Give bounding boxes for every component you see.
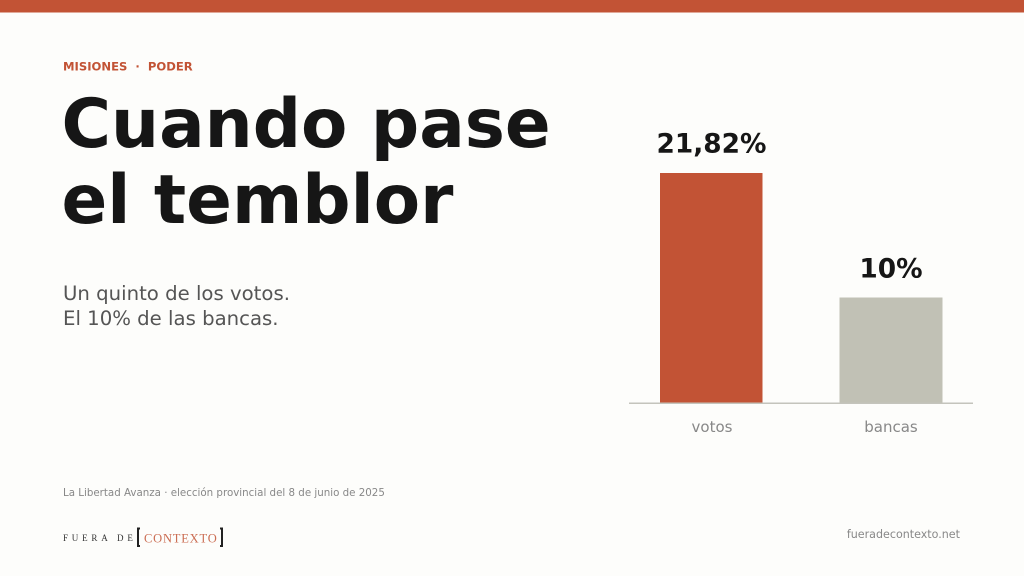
bar: bancas	[840, 298, 942, 403]
logo: Fuera de Contexto	[63, 528, 222, 546]
source note: La Libertad Avanza · elección provincial del 8 de junio de 2025	[63, 487, 385, 499]
subtitle: El 10% de las bancas.	[63, 307, 279, 330]
chart baseline	[629, 402, 973, 404]
bar chart: votos vs bancas	[629, 128, 973, 436]
logo: Fuera de Contexto: FUERA DE	[63, 533, 137, 543]
title	[62, 84, 551, 239]
logo: Fuera de Contexto: CONTEXTO	[144, 532, 218, 546]
value: bancas: 10%	[859, 254, 923, 284]
subtitle	[63, 282, 290, 330]
title: el temblor	[62, 160, 454, 239]
subtitle: Un quinto de los votos.	[63, 282, 290, 305]
bar: votos	[660, 173, 762, 403]
category label: bancas: bancas	[864, 418, 918, 436]
top accent band	[0, 0, 1024, 12]
website: fueradecontexto.net	[847, 528, 961, 541]
category label: votos: votos	[692, 418, 733, 436]
value: votos: 21,82%	[657, 128, 766, 160]
eyebrow label: MISIONES · PODER	[63, 60, 193, 74]
title: Cuando pase	[62, 84, 551, 163]
